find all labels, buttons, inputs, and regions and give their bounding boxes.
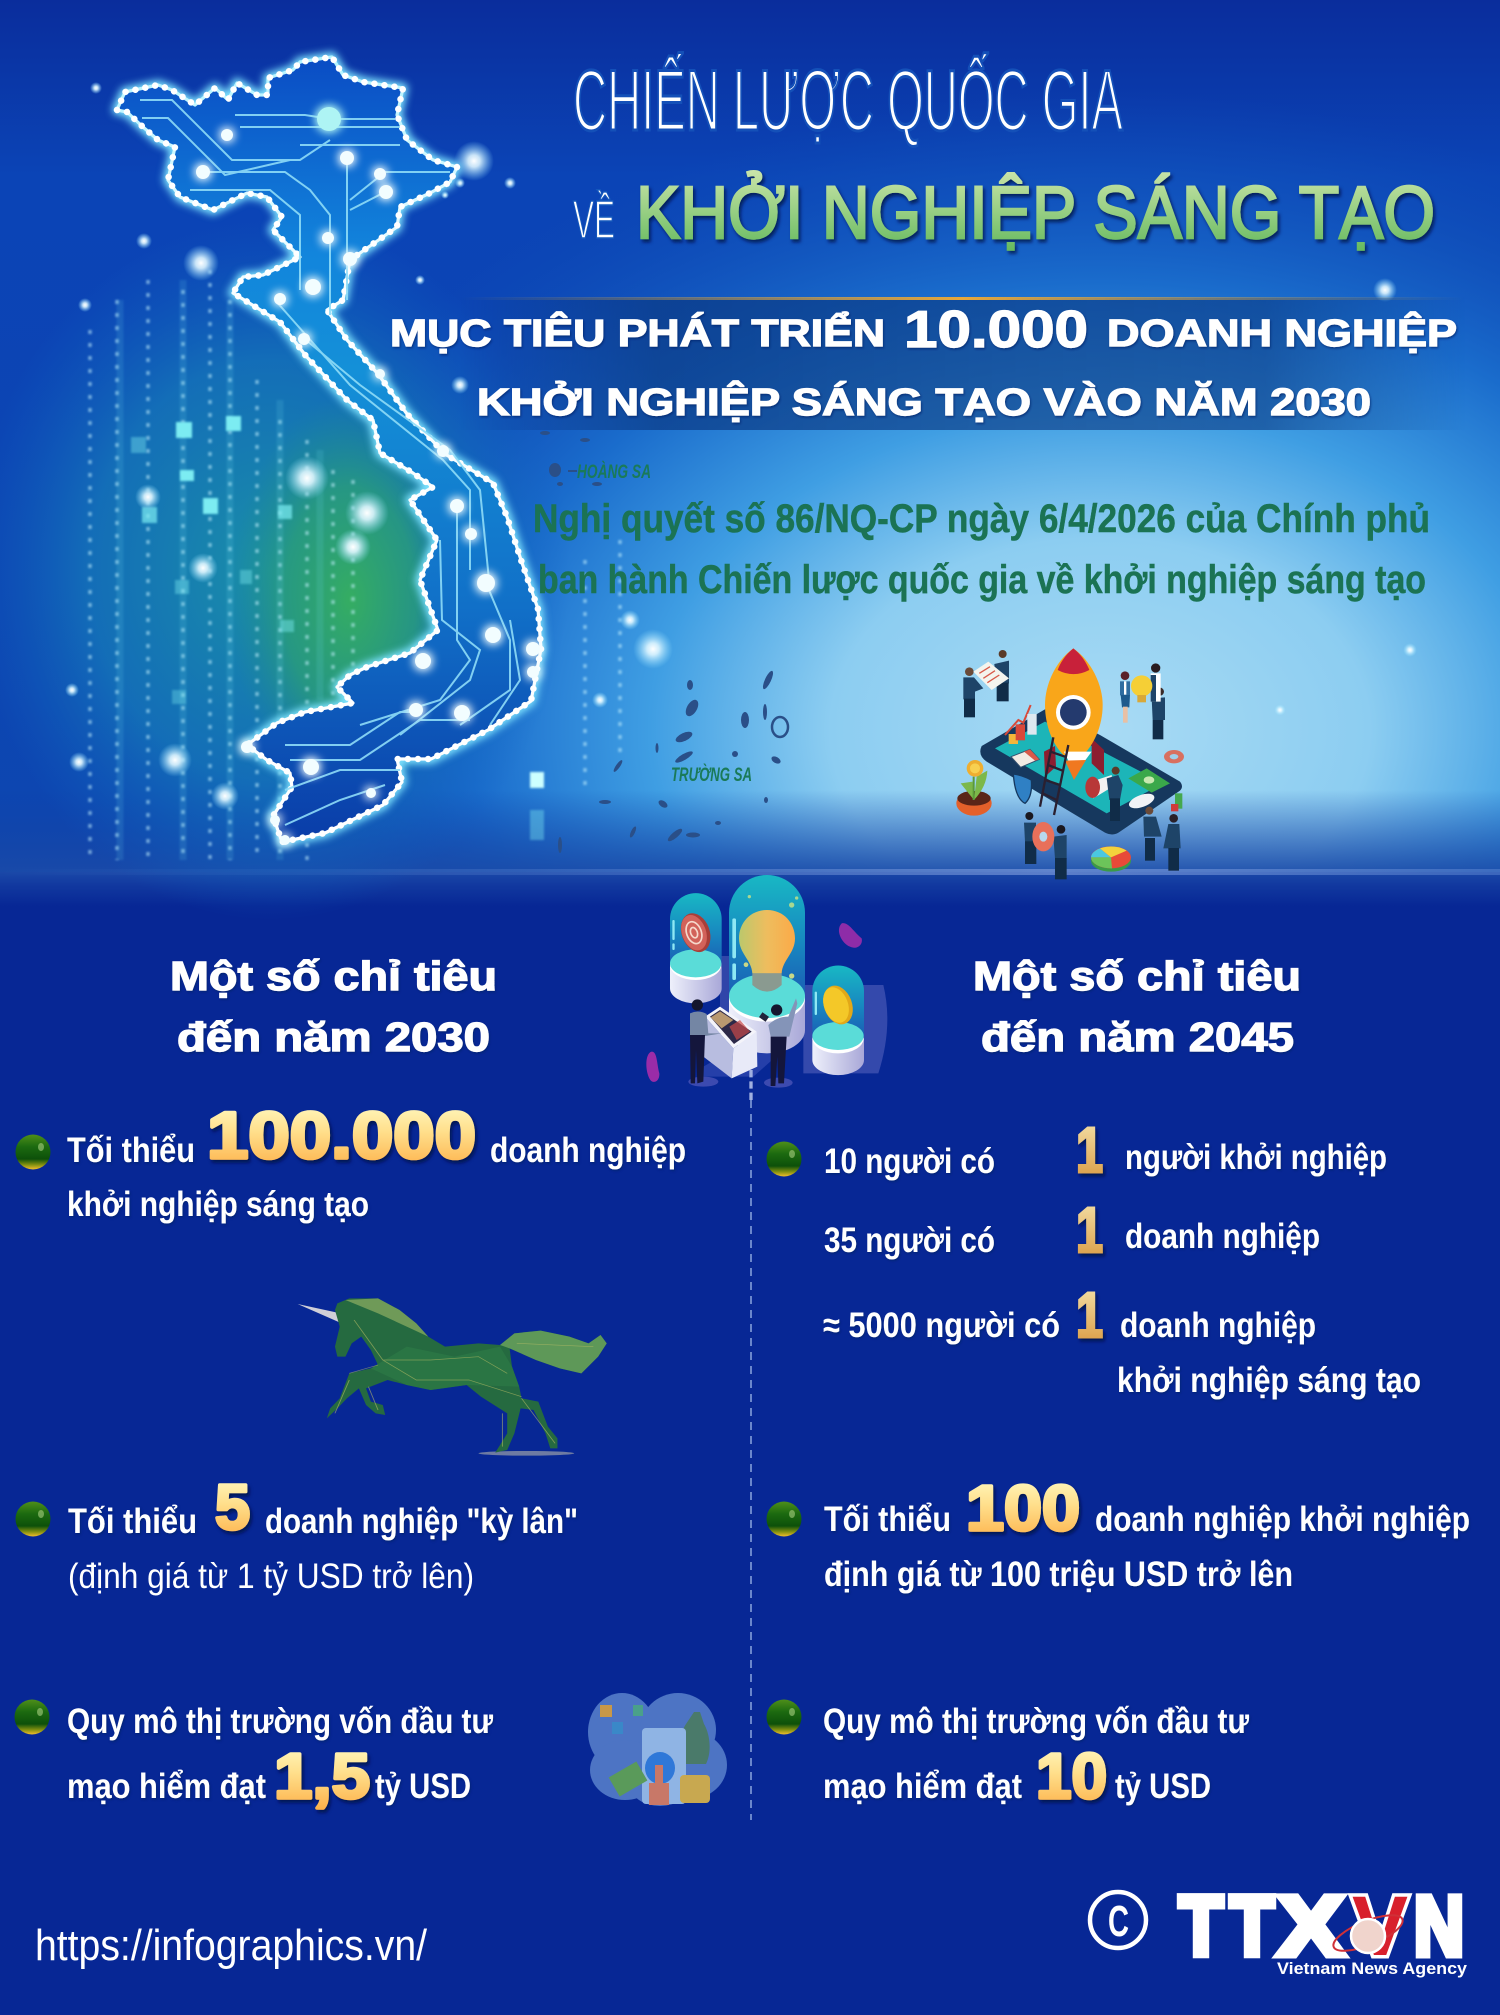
subtitle band: 10.000 target — [390, 297, 1465, 430]
logo: copyright and TTXVN — [1090, 1879, 1468, 1978]
title: VỀ — [573, 190, 615, 250]
target: 5 unicorns: (định giá từ 1 tỷ USD trở lên) — [68, 1557, 474, 1596]
logo: copyright and TTXVN: V — [1352, 1879, 1408, 1973]
logo: copyright and TTXVN: N — [1414, 1879, 1464, 1973]
heading: 2045 targets: đến năm 2045 — [981, 1014, 1294, 1060]
panel: 2030 targets — [14, 1098, 727, 1812]
logo: copyright and TTXVN: X — [1278, 1879, 1344, 1973]
target: 100.000 startups: 100.000 — [207, 1098, 476, 1172]
target: people to entrepreneurs ratios: khởi nghiệp sáng tạo — [1117, 1361, 1421, 1400]
target: people to entrepreneurs ratios: 1 — [1076, 1114, 1103, 1186]
target: 100.000 startups — [16, 1098, 686, 1224]
data rain backdrop with green glow — [0, 82, 1417, 920]
target: people to entrepreneurs ratios — [766, 1114, 1421, 1400]
subtitle band: 10.000 target: DOANH NGHIỆP — [1107, 311, 1457, 355]
islands: Trường Sa — [558, 670, 788, 853]
target: venture capital 1,5 billion: 1,5 — [274, 1740, 370, 1812]
target: people to entrepreneurs ratios: 35 người có — [824, 1221, 995, 1260]
subtitle band: 10.000 target: 10.000 — [904, 301, 1088, 359]
target: 100 startups valued over 100 million USD: 100 — [966, 1472, 1080, 1544]
heading: 2030 targets — [170, 953, 497, 1060]
target: venture capital 1,5 billion — [14, 1700, 494, 1812]
subtitle band: 10.000 target: KHỞI NGHIỆP SÁNG TẠO VÀO NĂM 2030 — [477, 380, 1371, 424]
islands: Hoàng Sa — [540, 431, 651, 486]
target: venture capital 1,5 billion: tỷ USD — [375, 1767, 471, 1806]
logo: copyright and TTXVN: C — [1108, 1897, 1129, 1946]
target: 5 unicorns — [16, 1471, 578, 1596]
map of Vietnam with circuit lines — [117, 57, 541, 845]
icon: innovation lab cylinders — [646, 875, 887, 1100]
target: 100.000 startups: Tối thiểu — [67, 1131, 195, 1170]
target: 100.000 startups: khởi nghiệp sáng tạo — [67, 1185, 369, 1224]
resolution text — [533, 497, 1430, 602]
target: venture capital 10 billion — [766, 1700, 1250, 1812]
target: 100.000 startups: doanh nghiệp — [490, 1131, 686, 1170]
target: venture capital 10 billion: tỷ USD — [1115, 1767, 1211, 1806]
target: venture capital 1,5 billion: mạo hiểm đạt — [67, 1767, 266, 1806]
target: 5 unicorns: doanh nghiệp "kỳ lân" — [265, 1502, 578, 1541]
icon: rocket on smartphone with people — [956, 648, 1184, 879]
heading: 2045 targets — [973, 953, 1301, 1060]
target: 100 startups valued over 100 million USD: Tối thiểu — [824, 1500, 951, 1539]
title — [573, 53, 1435, 254]
logo: copyright and TTXVN: T — [1230, 1879, 1274, 1973]
panel: 2045 targets — [766, 1114, 1470, 1812]
target: 5 unicorns: Tối thiểu — [68, 1502, 197, 1541]
target: people to entrepreneurs ratios: 1 — [1076, 1194, 1103, 1266]
target: 100 startups valued over 100 million USD: định giá từ 100 triệu USD trở lên — [824, 1555, 1293, 1594]
logo: copyright and TTXVN: Vietnam News Agency — [1277, 1959, 1468, 1978]
icon: venture capital cloud — [588, 1693, 727, 1806]
islands: Trường Sa: TRƯỜNG SA — [671, 764, 752, 786]
subtitle band: 10.000 target: MỤC TIÊU PHÁT TRIỂN — [390, 310, 885, 355]
heading: 2030 targets: đến năm 2030 — [177, 1014, 490, 1060]
target: people to entrepreneurs ratios: 10 người có — [824, 1142, 995, 1181]
icon: unicorn — [298, 1298, 607, 1456]
target: venture capital 10 billion: 10 — [1036, 1740, 1107, 1812]
target: people to entrepreneurs ratios: 1 — [1076, 1279, 1103, 1351]
logo: copyright and TTXVN: T — [1179, 1879, 1223, 1973]
column divider — [750, 1100, 752, 1820]
islands: Hoàng Sa: HOÀNG SA — [577, 461, 651, 483]
target: 5 unicorns: 5 — [215, 1471, 250, 1543]
heading: 2045 targets: Một số chỉ tiêu — [973, 953, 1301, 999]
target: venture capital 1,5 billion: Quy mô thị trường vốn đầu tư — [67, 1702, 494, 1741]
target: venture capital 10 billion: Quy mô thị trường vốn đầu tư — [823, 1702, 1250, 1741]
target: people to entrepreneurs ratios: người khởi nghiệp — [1125, 1138, 1387, 1177]
target: venture capital 10 billion: mạo hiểm đạt — [823, 1767, 1022, 1806]
target: people to entrepreneurs ratios: doanh nghiệp — [1120, 1306, 1316, 1345]
target: people to entrepreneurs ratios: doanh nghiệp — [1125, 1217, 1320, 1256]
target: people to entrepreneurs ratios: ≈ 5000 người có — [823, 1306, 1060, 1345]
target: 100 startups valued over 100 million USD — [766, 1472, 1470, 1594]
footer url: https://infographics.vn/ — [35, 1921, 428, 1970]
heading: 2030 targets: Một số chỉ tiêu — [170, 953, 497, 999]
